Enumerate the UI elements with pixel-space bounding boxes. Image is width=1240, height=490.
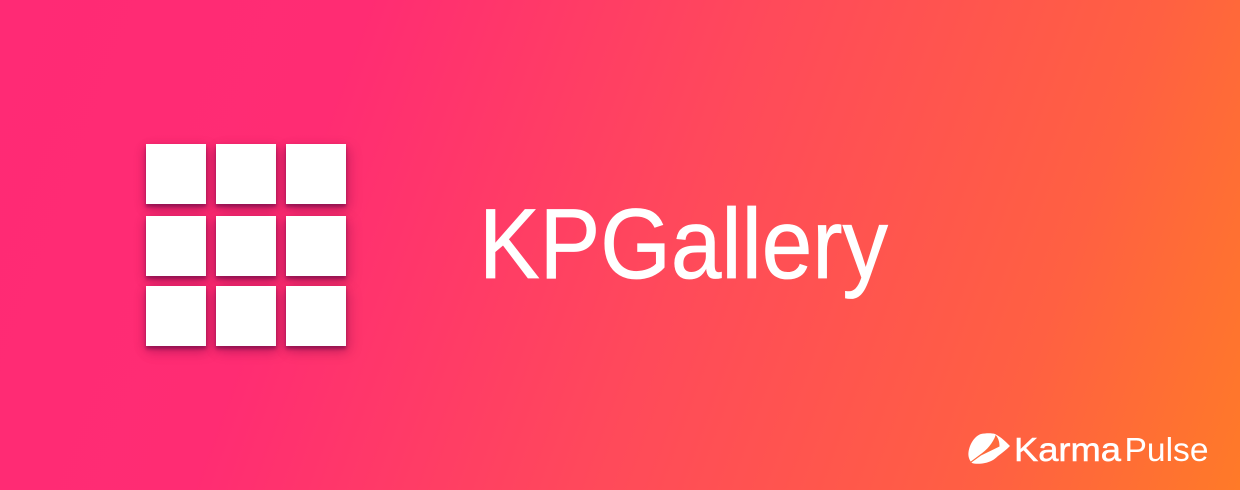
title: KPGallery [479, 188, 888, 299]
icon: gallery grid [139, 142, 354, 358]
wordmark: Karma [1014, 431, 1122, 468]
icon: logo mark [968, 433, 1010, 464]
wordmark [1014, 431, 1208, 468]
wordmark: Pulse [1124, 431, 1208, 468]
logo: KarmaPulse [968, 431, 1208, 468]
